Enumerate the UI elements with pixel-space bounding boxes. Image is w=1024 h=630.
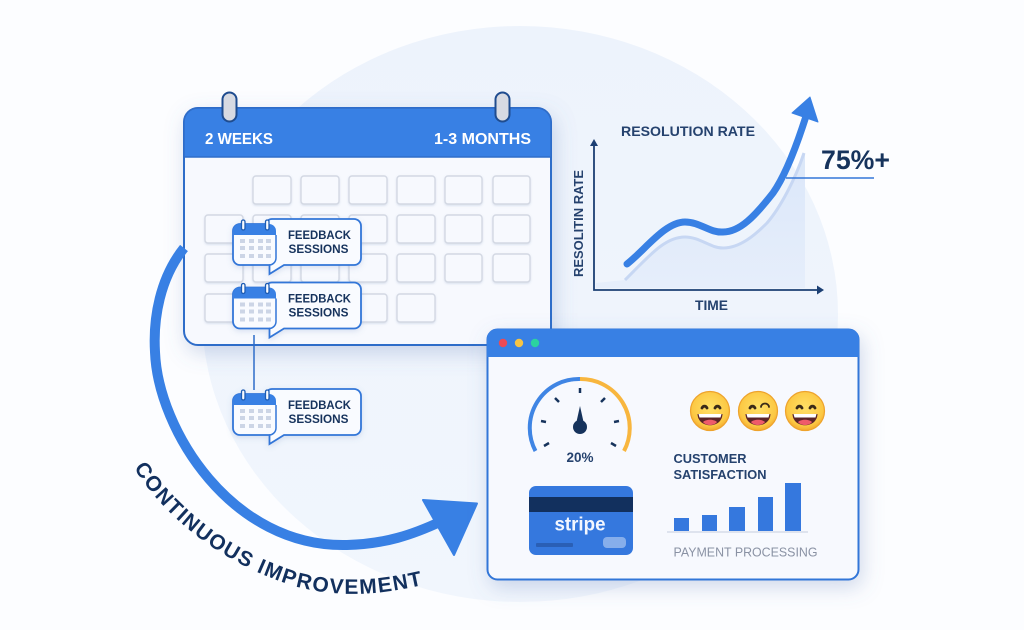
callout: feedback sessions 3 [233, 389, 361, 444]
calendar header [184, 108, 551, 157]
chart title: RESOLUTION RATE [621, 123, 755, 139]
label: 1-3 months: 1-3 MONTHS [434, 131, 531, 148]
chart: resolution rate [571, 97, 890, 313]
arrow: continuous improvement loop [155, 248, 477, 555]
value leader line [786, 177, 874, 179]
binder ring left [222, 92, 236, 122]
x axis label: TIME [695, 298, 728, 313]
callout: feedback sessions 1: SESSIONS [288, 244, 349, 256]
label: customer satisfaction [674, 451, 766, 482]
window control dots [499, 339, 539, 347]
label: payment processing: PAYMENT PROCESSING [674, 544, 818, 560]
chart area fill [596, 153, 805, 288]
chart trend line [627, 113, 807, 264]
callout: feedback sessions 2: SESSIONS [288, 308, 349, 320]
binder ring right [496, 92, 510, 122]
callout: feedback sessions 1: FEEDBACK [288, 230, 352, 242]
curved label: continuous improvement: CONTINUOUS IMPROVEMENT [136, 462, 420, 594]
gauge [530, 379, 630, 465]
emoji: smile [786, 392, 824, 430]
background circle [202, 26, 838, 602]
label: 2 weeks: 2 WEEKS [205, 131, 273, 148]
callout: feedback sessions 3: FEEDBACK [288, 400, 352, 412]
value: 75%+: 75%+ [821, 145, 890, 175]
stripe card [529, 486, 633, 555]
stripe card: stripe [554, 514, 606, 536]
label: customer satisfaction: CUSTOMER [674, 451, 747, 466]
axes [594, 142, 821, 290]
label: customer satisfaction: SATISFACTION [674, 467, 766, 482]
callout: feedback sessions 2 [233, 282, 361, 338]
emoji: wink [738, 392, 778, 430]
gauge: 20% [566, 450, 594, 465]
calendar day grid [205, 176, 530, 322]
panel: browser window [487, 329, 859, 580]
window body [488, 330, 858, 580]
bar chart [667, 483, 808, 532]
connector line [253, 335, 255, 390]
callout: feedback sessions 2: FEEDBACK [288, 294, 352, 306]
emoji: grin [690, 392, 730, 430]
calendar body [184, 108, 551, 345]
callout: feedback sessions 1 [233, 219, 361, 274]
callout: feedback sessions 3: SESSIONS [288, 414, 349, 426]
trend arrow head [792, 97, 818, 122]
window title bar [487, 329, 859, 357]
chart shadow line [625, 153, 804, 280]
y axis label: RESOLITIN RATE [571, 170, 586, 277]
panel: calendar [184, 92, 551, 345]
